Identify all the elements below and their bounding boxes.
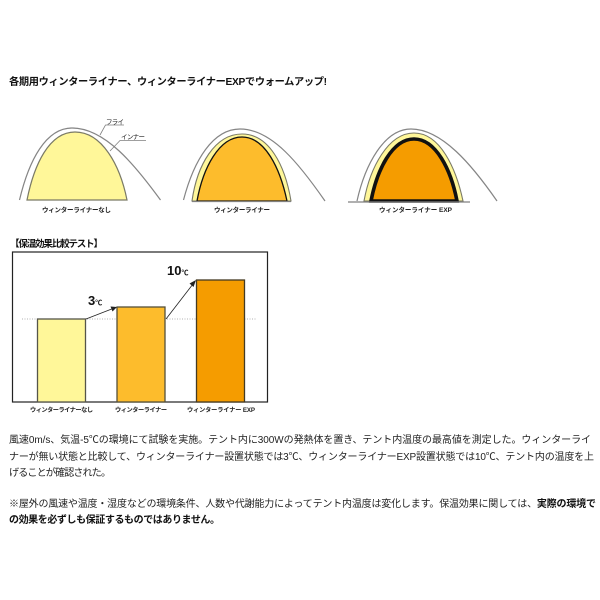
callout: inner: インナー (121, 133, 145, 141)
description text: 風速0m/s、気温-5℃の環境にて試験を実施。テント内に300Wの発熱体を置き、テント内温度の最高値を測定した。ウィンターライ (9, 433, 591, 446)
label: 3 degrees: 3℃ (88, 293, 102, 308)
bar chart (12, 252, 268, 414)
liner inner (197, 137, 287, 201)
disclaimer note (9, 497, 596, 526)
bar: no liner (38, 319, 86, 402)
disclaimer note: ※屋外の風速や温度・湿度などの環境条件、人数や代謝能力によってテント内温度は変化します。保温効果に関しては、実際の環境で (9, 497, 596, 510)
ground line (192, 200, 291, 202)
label: 10 degrees: 10℃ (167, 263, 188, 278)
liner outer (192, 134, 291, 201)
arrow: 10 degrees (166, 280, 196, 319)
callout: inner (110, 133, 146, 151)
title: 各期用ウィンターライナー、ウィンターライナーEXPでウォームアップ! (9, 75, 327, 88)
caption: ウィンターライナー (214, 205, 270, 214)
diagram: tent with winter liner (184, 129, 325, 214)
diagram: tent with winter liner EXP (348, 129, 497, 214)
bar label: no liner: ウィンターライナーなし (30, 406, 93, 414)
arrow: 3 degrees (86, 306, 117, 319)
liner outer (364, 133, 463, 201)
callout: fly: フライ (106, 118, 124, 126)
caption: ウィンターライナー EXP (379, 205, 453, 214)
bar: winter liner EXP (196, 280, 244, 402)
caption: ウィンターライナーなし (42, 205, 111, 214)
chart frame (12, 252, 268, 402)
section heading: 【保温効果比較テスト】 (10, 238, 103, 250)
fly outline (184, 129, 325, 201)
diagram: tent without liner (20, 118, 160, 214)
ground line (348, 201, 470, 203)
bar label: EXP: ウィンターライナー EXP (187, 406, 255, 414)
disclaimer note: の効果を必ずしも保証するものではありません。 (9, 513, 220, 526)
description text: げることが確認された。 (9, 466, 111, 479)
description text (9, 433, 594, 479)
description text: ナーが無い状態と比較して、ウィンターライナー設置状態では3℃、ウィンターライナーEXP設置状態では10℃、テント内の温度を上 (9, 450, 594, 463)
tent inner (27, 132, 127, 200)
liner EXP (371, 139, 457, 201)
bar label: liner: ウィンターライナー (115, 406, 167, 414)
fly outline (357, 129, 497, 201)
tent fly outline (20, 128, 160, 200)
bar: winter liner (117, 307, 165, 402)
callout: fly (100, 118, 124, 135)
